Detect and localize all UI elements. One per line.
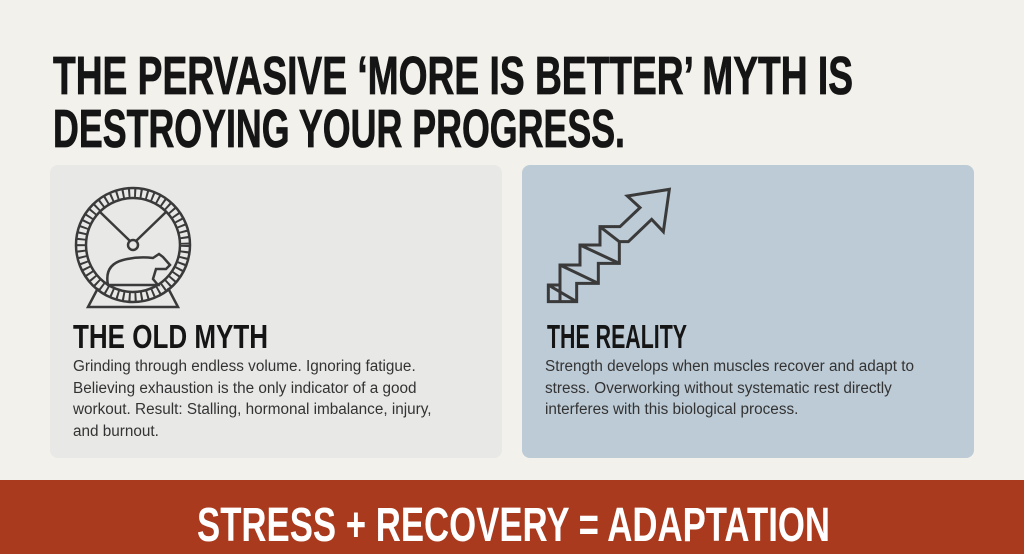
panel: old myth [50, 165, 502, 458]
text: reality body: Strength develops when muscles recover and adapt to stress. Overworking without systematic rest directly interferes with this biological process. [545, 358, 914, 418]
icon: hamster wheel [74, 186, 192, 308]
icon: staircase arrow [546, 188, 672, 304]
title [53, 46, 853, 159]
panel: reality [522, 165, 974, 458]
heading: the reality: THE REALITY [547, 318, 687, 355]
title: DESTROYING YOUR PROGRESS. [53, 99, 625, 159]
heading: the old myth: THE OLD MYTH [73, 318, 268, 355]
text: old myth body: Grinding through endless volume. Ignoring fatigue. Believing exhaustion is the only indicator of a good workout. Result: Stalling, hormonal imbalance, injury, and burnout. [73, 358, 432, 440]
banner: formula [0, 480, 1024, 554]
